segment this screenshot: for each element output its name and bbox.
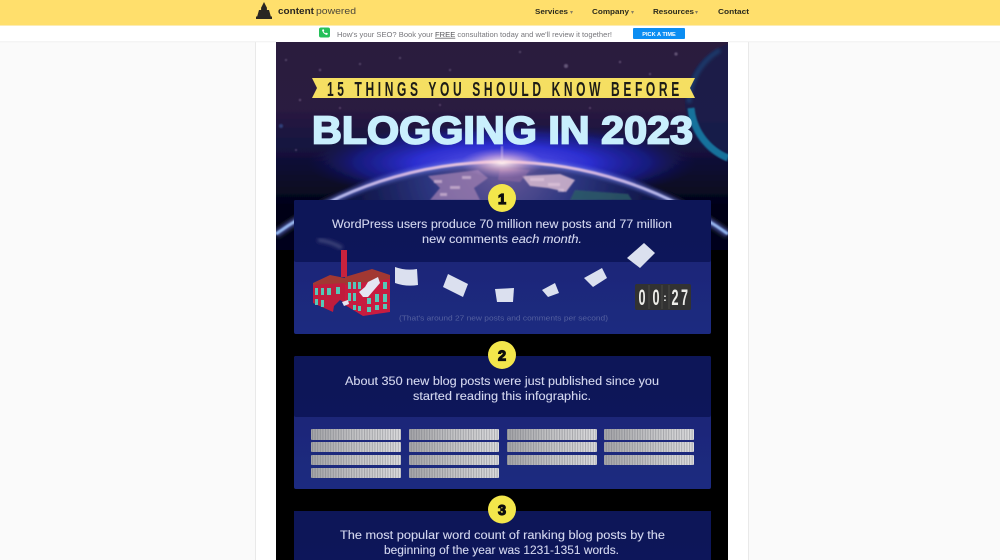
call to action button: PICK A TIME — [642, 32, 676, 38]
promo bar — [0, 26, 1000, 42]
badge 2 — [488, 341, 516, 369]
horizon rim glow — [276, 162, 728, 234]
nav arrow: services: ▾ — [570, 10, 573, 16]
panel 2 — [294, 356, 711, 489]
ribbon banner — [312, 78, 695, 98]
sunrise flare — [460, 146, 544, 178]
infographic artwork — [276, 42, 728, 560]
blog post bars — [311, 429, 694, 478]
flip clock: 7 — [681, 285, 688, 310]
badge 1 — [488, 184, 516, 212]
call to action button — [633, 28, 685, 39]
flip clock: 0 — [652, 285, 660, 310]
page column — [255, 42, 749, 560]
promo text: How's your SEO? Book your FREE consultation today and we'll review it together! — [337, 30, 612, 39]
flip clock — [635, 284, 691, 310]
earth — [276, 162, 728, 250]
icon: factory — [313, 240, 390, 316]
panel 1 statement: new comments each month. — [422, 232, 582, 246]
land speckle — [434, 176, 564, 196]
horizon glow — [310, 126, 694, 186]
flip clock: 0 — [638, 285, 646, 310]
main title: BLOGGING IN 2023 — [312, 110, 693, 152]
nav arrow: resources: ▾ — [695, 10, 698, 16]
flying sheets — [395, 243, 655, 302]
star field — [279, 51, 678, 151]
panel 1 statement: WordPress users produce 70 million new posts and 77 million — [332, 217, 672, 231]
right planet — [685, 44, 728, 162]
brand name: powered — [316, 5, 356, 16]
badge 3: 3 — [498, 503, 506, 519]
panel 1 caption: (That's around 27 new posts and comments per second) — [399, 314, 608, 322]
panel 2 statement — [345, 374, 659, 403]
nav: services: Services — [535, 7, 568, 16]
brand name — [278, 5, 356, 16]
panel 3 statement: The most popular word count of ranking blog posts by the — [340, 528, 665, 542]
flip clock: 2 — [671, 285, 679, 310]
top navigation bar — [0, 0, 1000, 26]
brand name: content — [278, 5, 314, 16]
badge 1: 1 — [498, 192, 506, 208]
ribbon text: 15 THINGS YOU SHOULD KNOW BEFORE — [327, 79, 683, 101]
panel 3 statement — [340, 528, 665, 557]
panel 1 statement — [332, 219, 672, 243]
space background — [276, 42, 728, 560]
panel 3 statement: beginning of the year was 1231-1351 words. — [384, 543, 619, 557]
nav: resources: Resources — [653, 7, 694, 16]
panel 1 — [294, 200, 711, 334]
icon: logo — [256, 2, 272, 19]
icon: phone chat — [319, 28, 330, 38]
badge 3 — [488, 496, 516, 524]
panel 2 statement: About 350 new blog posts were just published since you — [345, 374, 659, 388]
land masses — [428, 168, 632, 200]
panel 2 statement: started reading this infographic. — [413, 389, 591, 403]
nav: company: Company — [592, 7, 630, 16]
nav: contact: Contact — [718, 7, 750, 16]
badge 2: 2 — [498, 348, 506, 364]
horizon rim — [276, 162, 728, 234]
flip clock: : — [663, 292, 667, 304]
panel 3 — [294, 511, 711, 560]
nav arrow: company: ▾ — [631, 10, 634, 16]
